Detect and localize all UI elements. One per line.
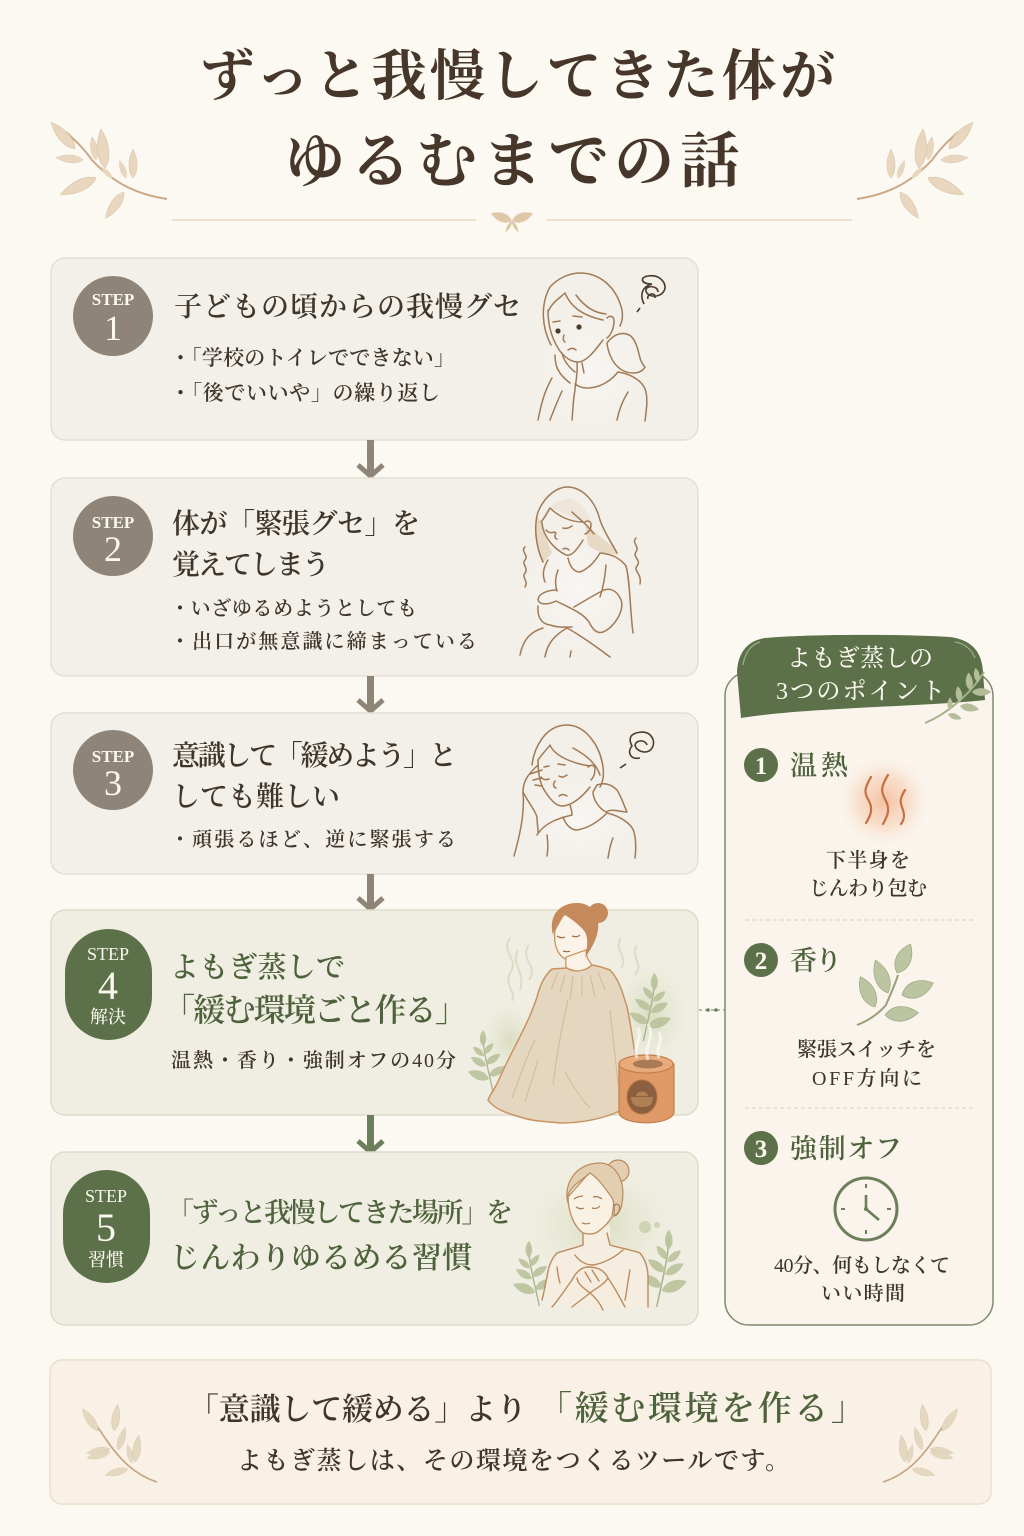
point 3: forced off: 強制オフ — [790, 1134, 902, 1164]
badge: step 5: 習慣 — [88, 1250, 126, 1270]
illustration: steaming pot — [619, 1024, 674, 1123]
panel: step 4 — [51, 903, 698, 1123]
badge: step 4: 解決 — [90, 1007, 126, 1027]
point 2: scent — [744, 941, 936, 1090]
badge: step 5 — [63, 1170, 150, 1283]
arrow: step 3 to 4 — [358, 874, 383, 909]
illustration: sprigs and steam behind cape — [466, 938, 690, 1092]
text: step 2 bullets: ・出口が無意識に締まっている — [170, 629, 477, 653]
icon: right title sprig — [857, 119, 977, 221]
title divider — [172, 209, 852, 233]
icon: heat waves — [839, 756, 929, 846]
text: conclusion main: 「意識して緩める」より — [188, 1392, 527, 1427]
text: step 4 note: 温熱・香り・強制オフの40分 — [171, 1049, 456, 1072]
ribbon header — [737, 635, 991, 723]
badge: step 1 — [73, 276, 153, 356]
text: step 1 bullets — [170, 346, 455, 405]
panel: yomogi points — [725, 635, 993, 1325]
badge: step 2 — [73, 496, 153, 576]
text: conclusion sub: よもぎ蒸しは、その環境をつくるツールです。 — [237, 1447, 790, 1475]
icon: yomogi leaf — [854, 941, 936, 1025]
ribbon header: よもぎ蒸しの — [787, 645, 933, 672]
point 1: heat: じんわり包む — [809, 877, 927, 900]
heading: step 4: よもぎ蒸しで — [170, 951, 345, 984]
badge: step 3 — [73, 730, 153, 810]
icon: left title sprig — [47, 119, 167, 221]
text: step 3 bullet: ・頑張るほど、逆に緊張する — [170, 828, 456, 851]
text: step 1 bullets: ・「学校のトイレでできない」 — [170, 346, 455, 370]
arrow: step 1 to 2 — [358, 440, 383, 476]
illustration: woman in cape — [488, 903, 636, 1123]
badge: step 1: STEP — [92, 290, 134, 309]
icon: left sprig — [79, 1404, 157, 1482]
text: step 2 bullets — [170, 597, 477, 653]
heading: step 5: 「ずっと我慢してきた場所」を — [167, 1198, 513, 1228]
point 1: heat: 下半身を — [826, 849, 910, 872]
text: step 2 bullets: ・いざゆるめようとしても — [170, 597, 417, 620]
point 2: scent: OFF方向に — [812, 1067, 922, 1090]
illustration: woman hand on forehead — [514, 725, 654, 865]
point 1: heat: 温熱 — [790, 751, 849, 781]
badge: step 4: 4 — [98, 963, 118, 1008]
badge: step 4 — [65, 929, 152, 1040]
badge: step 1: 1 — [104, 308, 122, 348]
point 2: scent: 香り — [790, 946, 842, 976]
point 2: scent: 2 — [755, 948, 767, 975]
illustration: woman with hands on chest — [511, 1160, 689, 1310]
badge: step 5: STEP — [85, 1186, 127, 1206]
heading: step 2 — [172, 508, 420, 581]
badge: step 3: STEP — [92, 747, 134, 766]
heading: step 2: 体が「緊張グセ」を — [172, 508, 420, 540]
arrow: step 2 to 3 — [358, 676, 383, 711]
heading: step 3 — [172, 740, 457, 813]
point 1: heat: 1 — [755, 753, 767, 780]
point 3: forced off: 40分、何もしなくて — [774, 1254, 950, 1277]
text: conclusion main — [188, 1390, 865, 1428]
point 1: heat — [744, 748, 929, 900]
point 3: forced off: 3 — [755, 1136, 767, 1163]
panel: conclusion — [50, 1360, 991, 1504]
badge: step 3: 3 — [104, 763, 122, 803]
heading: step 2: 覚えてしまう — [172, 549, 330, 581]
arrow: step 4 to 5 — [358, 1115, 383, 1152]
heading: step 3: しても難しい — [172, 781, 340, 813]
illustration: woman thinking, hand on cheek — [535, 273, 665, 430]
badge: step 2: 2 — [104, 529, 122, 569]
panel: step 1 — [51, 258, 698, 440]
icon: ribbon sprig — [925, 667, 991, 723]
badge: step 4: STEP — [87, 944, 129, 964]
panel: step 3 — [51, 713, 698, 874]
badge: step 5: 5 — [96, 1205, 116, 1250]
panel: step 5 — [51, 1152, 698, 1325]
heading: step 1: 子どもの頃からの我慢グセ — [174, 291, 521, 323]
heading: step 5: じんわりゆるめる習慣 — [170, 1242, 475, 1275]
connector: step 4 to side panel — [699, 1008, 725, 1012]
heading: step 4: 「緩む環境ごと作る」 — [163, 992, 467, 1028]
illustration: woman hugging herself — [520, 487, 640, 657]
point 3: forced off — [744, 1131, 950, 1305]
title — [200, 46, 835, 195]
point 3: forced off: いい時間 — [821, 1282, 905, 1305]
heading: step 5 — [167, 1198, 513, 1275]
text: conclusion main: 「緩む環境を作る」 — [538, 1390, 865, 1428]
badge: step 2: STEP — [92, 513, 134, 532]
point 2: scent: 緊張スイッチを — [797, 1038, 936, 1061]
heading: step 4 — [163, 951, 467, 1028]
title: ゆるむまでの話 — [285, 129, 740, 195]
ribbon header: 3つのポイント — [776, 679, 945, 705]
icon: right sprig — [883, 1404, 961, 1482]
text: step 1 bullets: ・「後でいいや」の繰り返し — [170, 381, 440, 405]
panel: step 2 — [51, 478, 698, 676]
title: ずっと我慢してきた体が — [200, 46, 835, 107]
heading: step 3: 意識して「緩めよう」と — [172, 740, 457, 772]
icon: clock — [835, 1178, 897, 1240]
